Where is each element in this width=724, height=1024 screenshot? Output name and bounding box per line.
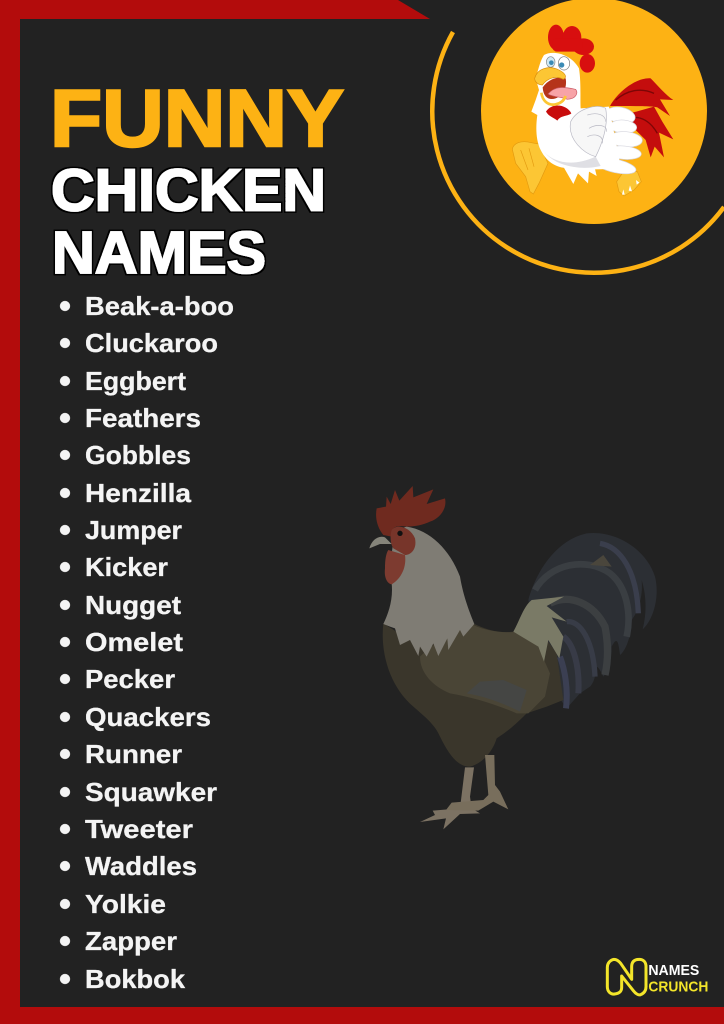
list of chicken names: Pecker: [85, 664, 175, 694]
logo wordmark: NAMES: [648, 962, 699, 979]
title: FUNNY: [50, 74, 344, 164]
list of chicken names: Bokbok: [85, 964, 186, 994]
yellow circle with running chicken: [481, 0, 707, 224]
list of chicken names: Eggbert: [85, 366, 186, 396]
list of chicken names: Feathers: [85, 403, 201, 433]
title: CHICKEN: [51, 158, 326, 224]
list of chicken names: Yolkie: [85, 889, 166, 919]
title: [50, 74, 344, 286]
list of chicken names: Beak-a-boo: [85, 291, 234, 321]
list of chicken names: Gobbles: [85, 440, 191, 470]
logo wordmark: [648, 962, 708, 996]
list of chicken names: Quackers: [85, 702, 211, 732]
list of chicken names: Henzilla: [85, 478, 192, 508]
icon: N logo mark: [607, 959, 646, 995]
list of chicken names: Squawker: [85, 777, 217, 807]
list of chicken names: Jumper: [85, 515, 182, 545]
list of chicken names: Tweeter: [85, 814, 193, 844]
list of chicken names: Runner: [85, 739, 182, 769]
list of chicken names: Zapper: [85, 926, 177, 956]
list of chicken names: Nugget: [85, 590, 181, 620]
logo wordmark: CRUNCH: [648, 979, 708, 996]
list of chicken names: [60, 291, 234, 994]
list of chicken names: Waddles: [85, 851, 197, 881]
title: NAMES: [52, 220, 266, 286]
logo: Names Crunch: [607, 959, 708, 996]
list of chicken names: Omelet: [85, 627, 183, 657]
list of chicken names: Kicker: [85, 552, 168, 582]
icon: faded rooster: [369, 486, 657, 829]
yellow arc: [432, 32, 724, 273]
list of chicken names: Cluckaroo: [85, 328, 218, 358]
icon: cartoon chicken: [512, 25, 673, 196]
